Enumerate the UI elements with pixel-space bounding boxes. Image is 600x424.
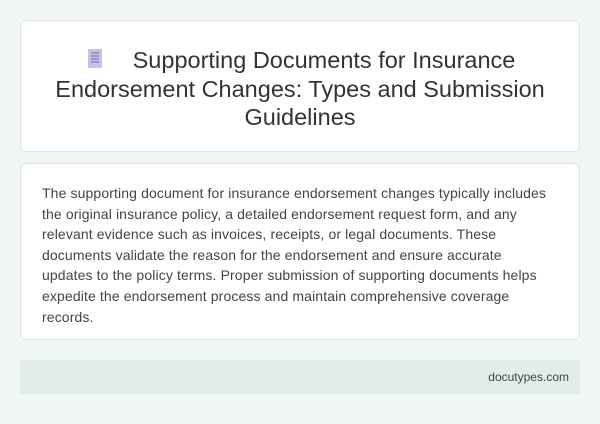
footer (20, 360, 580, 394)
title (55, 47, 545, 130)
footer: docutypes.com (488, 370, 569, 384)
title: Endorsement Changes: Types and Submission (55, 76, 545, 102)
text block: The supporting document for insurance endorsement changes typically includes the original insurance policy, a detailed endorsement request form, and any relevant evidence such as invoices, receipts, or legal documents. These documents validate the reason for the endorsement and ensure accurate updates to the policy terms. Proper submission of supporting documents helps expedite the endorsement process and maintain comprehensive coverage records. (42, 185, 546, 325)
panel: description (20, 163, 580, 340)
title: Guidelines (244, 104, 356, 130)
title: Supporting Documents for Insurance (133, 47, 515, 73)
panel: title (20, 20, 580, 152)
